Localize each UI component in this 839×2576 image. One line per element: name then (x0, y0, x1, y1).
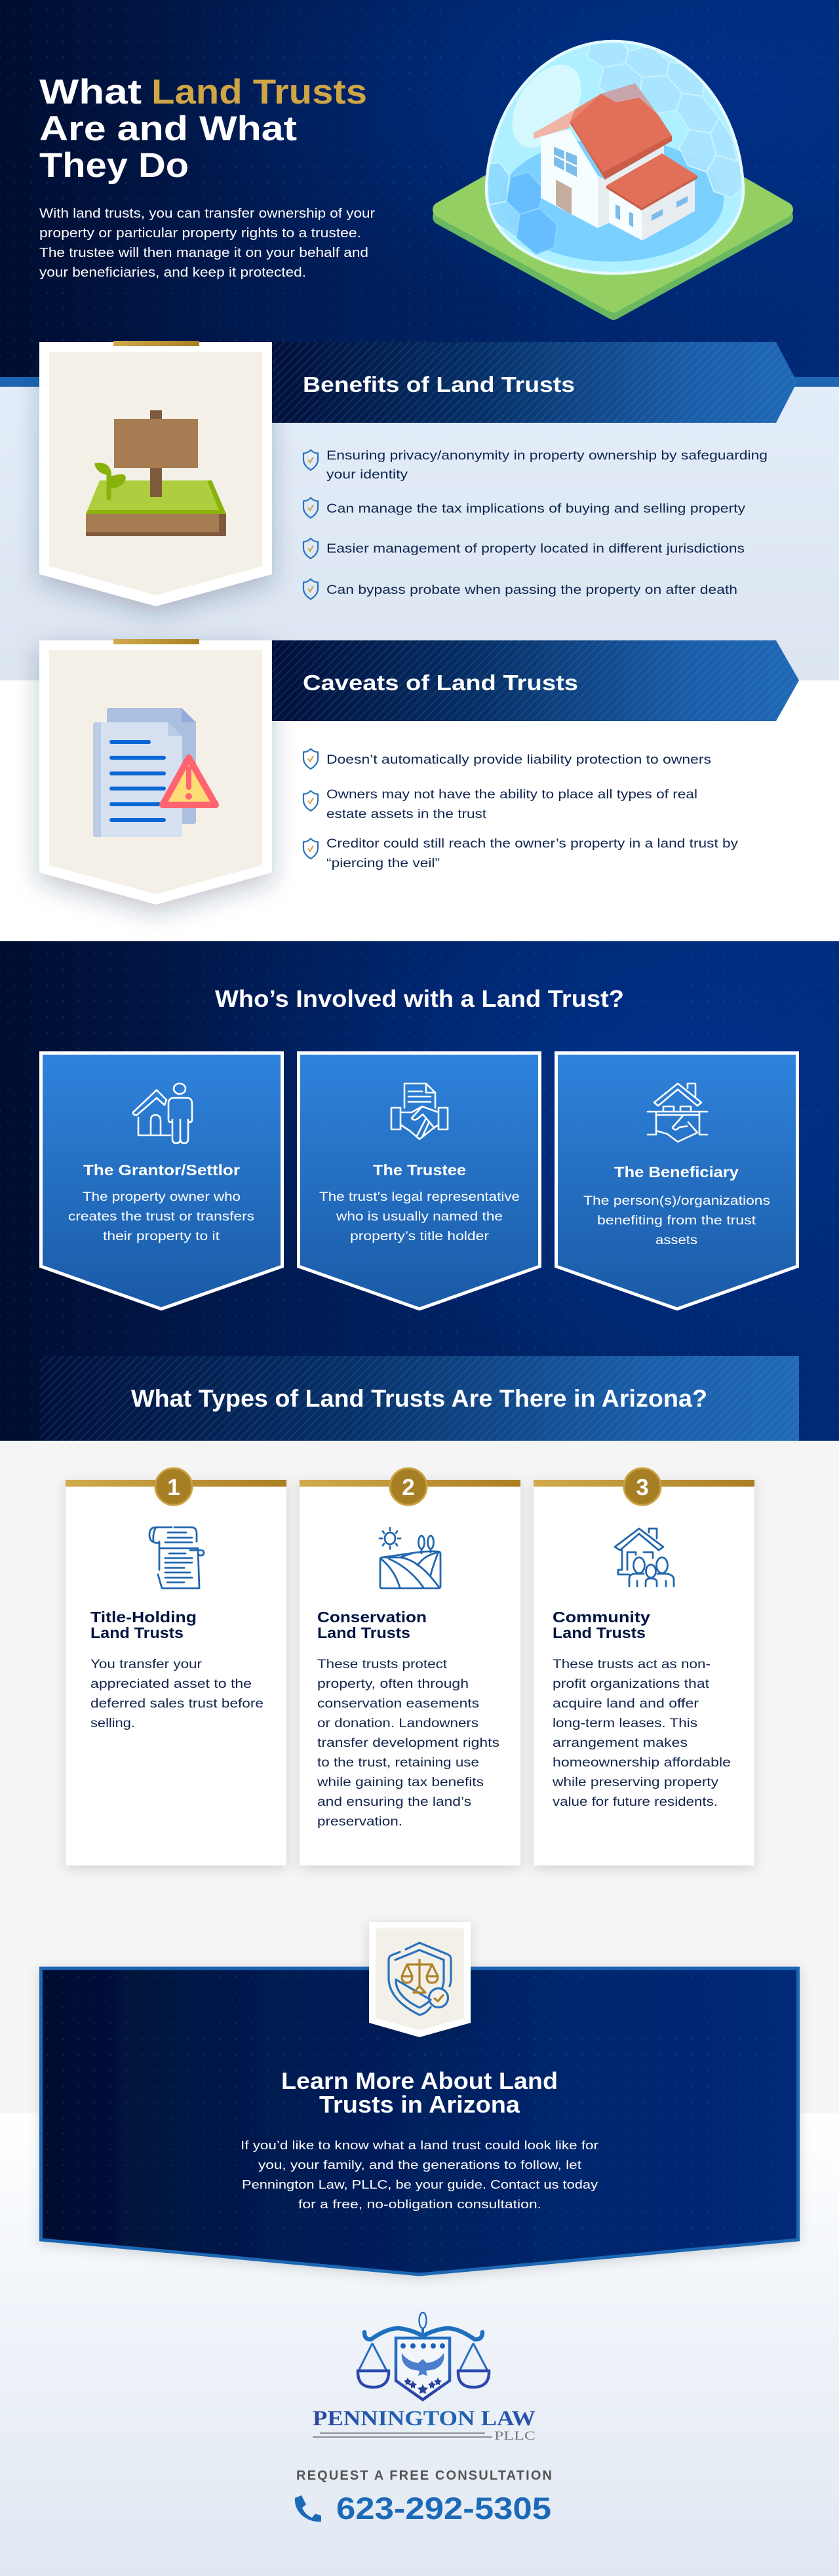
caveat item 1 (303, 749, 711, 769)
panel: conservation card: property, often through (317, 1677, 469, 1691)
icon: sign on land plot (86, 410, 226, 536)
benefit item 3 (303, 539, 745, 558)
panel: beneficiary card: The Beneficiary (614, 1163, 739, 1181)
benefit item 2: Can manage the tax implications of buying and selling property (326, 502, 746, 516)
icon: documents with warning (93, 708, 216, 837)
section background: who's involved (0, 941, 839, 1441)
section background: caveats (0, 680, 839, 941)
badge: number 3: 3 (636, 1475, 649, 1500)
caveat item 2 (303, 788, 697, 821)
icon: house and person (133, 1083, 192, 1143)
panel: community card (534, 1468, 754, 1865)
benefit item 3: Easier management of property located in different jurisdictions (326, 542, 745, 556)
badge: number 1: 1 (167, 1475, 180, 1500)
panel: grantor card: The Grantor/Settlor (83, 1161, 240, 1179)
panel: community card: long-term leases. This (553, 1717, 697, 1730)
list: caveats (303, 749, 739, 870)
caveat item 3 (303, 837, 739, 870)
caveat item 3: Creditor could still reach the owner’s property in a land trust by (326, 837, 739, 851)
panel: conservation card: or donation. Landowners (317, 1717, 478, 1730)
panel: community card: Land Trusts (553, 1624, 646, 1641)
panel: conservation card: transfer development rights (317, 1736, 499, 1750)
heading: who's involved: Who’s Involved with a Land Trust? (215, 985, 624, 1012)
benefit item 4 (303, 579, 737, 599)
logo: Pennington Law: PENNINGTON LAW (313, 2407, 536, 2430)
list: benefits (303, 449, 768, 599)
intro paragraph: property or particular property rights to a trustee. (39, 225, 361, 241)
panel: conservation card: while gaining tax benefits (317, 1776, 484, 1789)
banner: benefits heading: Benefits of Land Trusts (303, 373, 575, 397)
panel: conservation card: to the trust, retaining use (317, 1756, 479, 1770)
banner: caveats heading (272, 640, 799, 721)
banner: caveats heading: Caveats of Land Trusts (303, 671, 578, 695)
panel: conservation card: preservation. (317, 1815, 402, 1829)
panel: community card: while preserving property (552, 1776, 719, 1789)
panel: beneficiary card: benefiting from the trust (597, 1214, 756, 1228)
panel: conservation card: and ensuring the land’s (317, 1795, 471, 1809)
badge: number 1 (155, 1468, 192, 1505)
icon: house over handshake (648, 1083, 707, 1142)
caveat item 1: Doesn’t automatically provide liability protection to owners (326, 753, 711, 767)
panel: call to action: you, your family, and the generations to follow, let (258, 2158, 581, 2172)
badge: number 2: 2 (402, 1475, 415, 1500)
title: Are and What (39, 109, 297, 148)
panel: community card: homeownership affordable (553, 1756, 731, 1770)
benefit item 4: Can bypass probate when passing the property on after death (326, 583, 737, 597)
panel: title-holding card: appreciated asset to the (90, 1677, 252, 1691)
panel: conservation card: These trusts protect (317, 1658, 448, 1671)
panel: call to action (41, 1922, 798, 2274)
icon: field with sun (380, 1528, 440, 1588)
panel: caveats icon card (39, 639, 272, 905)
panel: conservation card: Land Trusts (317, 1624, 410, 1641)
section background: hero (0, 0, 839, 387)
title: What (39, 73, 142, 111)
logo: Pennington Law: PLLC (494, 2429, 536, 2443)
section background: footer (0, 2113, 839, 2576)
panel: community card: profit organizations that (553, 1677, 710, 1691)
benefit item 2 (303, 498, 746, 518)
badge: shield with scales (369, 1922, 471, 2037)
panel: grantor card (41, 1053, 282, 1309)
benefit item 1 (303, 449, 768, 482)
hero illustration: house under protective dome (440, 39, 785, 312)
panel: grantor card: creates the trust or transfers (68, 1210, 254, 1224)
panel: call to action: for a free, no-obligation consultation. (298, 2197, 541, 2211)
panel: community card: arrangement makes (553, 1736, 688, 1750)
caveat item 3: “piercing the veil” (326, 857, 440, 870)
panel: conservation card (300, 1468, 520, 1865)
icon: document and handshake (391, 1083, 448, 1139)
icon: phone (295, 2495, 321, 2522)
panel: call to action: Pennington Law, PLLC, be your guide. Contact us today (242, 2177, 598, 2191)
panel: trustee card: who is usually named the (336, 1210, 503, 1224)
section background: types (0, 1441, 839, 2113)
panel: trustee card: The trust’s legal representative (319, 1190, 520, 1204)
panel: trustee card (299, 1053, 540, 1309)
panel: call to action: Learn More About Land (281, 2067, 558, 2094)
house (534, 83, 697, 241)
contact prompt: REQUEST A FREE CONSULTATION (296, 2469, 552, 2483)
panel: conservation card: conservation easements (317, 1697, 479, 1711)
panel: title-holding card: Land Trusts (90, 1624, 184, 1641)
panel: beneficiary card: assets (655, 1234, 697, 1247)
panel: call to action: If you’d like to know what a land trust could look like for (241, 2138, 598, 2152)
panel: beneficiary card: The person(s)/organizations (583, 1194, 770, 1208)
panel: title-holding card: selling. (90, 1717, 135, 1730)
panel: conservation card: Conservation (317, 1609, 427, 1626)
badge: number 2 (390, 1468, 427, 1505)
benefit item 1: Ensuring privacy/anonymity in property ownership by safeguarding (326, 449, 768, 463)
panel: call to action: Trusts in Arizona (319, 2091, 520, 2118)
panel: title-holding card (66, 1468, 286, 1865)
banner: types heading: What Types of Land Trusts Are There in Arizona? (131, 1385, 707, 1412)
panel: title-holding card: Title-Holding (90, 1609, 197, 1626)
phone number: 623-292-5305 (336, 2491, 551, 2526)
title: Land Trusts (151, 73, 367, 111)
section background: benefits (0, 387, 839, 680)
title: They Do (39, 146, 189, 185)
panel: community card: These trusts act as non- (553, 1658, 711, 1671)
benefit item 1: your identity (326, 468, 408, 482)
panel: community card: value for future residents. (553, 1795, 718, 1809)
icon: family and house (615, 1529, 674, 1586)
intro paragraph (39, 206, 375, 280)
icon: scroll document (149, 1527, 204, 1588)
panel: beneficiary card (556, 1053, 797, 1309)
intro paragraph: With land trusts, you can transfer ownership of your (39, 206, 375, 221)
panel: trustee card: The Trustee (373, 1161, 466, 1179)
panel: benefits icon card (39, 341, 272, 606)
caveat item 2: estate assets in the trust (326, 808, 487, 821)
panel: title-holding card: You transfer your (90, 1658, 203, 1671)
title (39, 73, 367, 185)
caveat item 2: Owners may not have the ability to place all types of real (326, 788, 697, 802)
banner: types heading (39, 1356, 799, 1441)
badge: number 3 (624, 1468, 661, 1505)
intro paragraph: The trustee will then manage it on your behalf and (39, 245, 368, 260)
panel: title-holding card: deferred sales trust before (90, 1697, 263, 1711)
banner: benefits heading (272, 342, 797, 423)
panel: trustee card: property’s title holder (350, 1230, 490, 1243)
intro paragraph: your beneficiaries, and keep it protected. (39, 265, 306, 280)
panel: grantor card: The property owner who (83, 1190, 241, 1204)
panel: community card: Community (553, 1609, 650, 1626)
panel: grantor card: their property to it (103, 1230, 220, 1243)
logo: Pennington Law (313, 2313, 536, 2443)
panel: community card: acquire land and offer (553, 1697, 699, 1711)
